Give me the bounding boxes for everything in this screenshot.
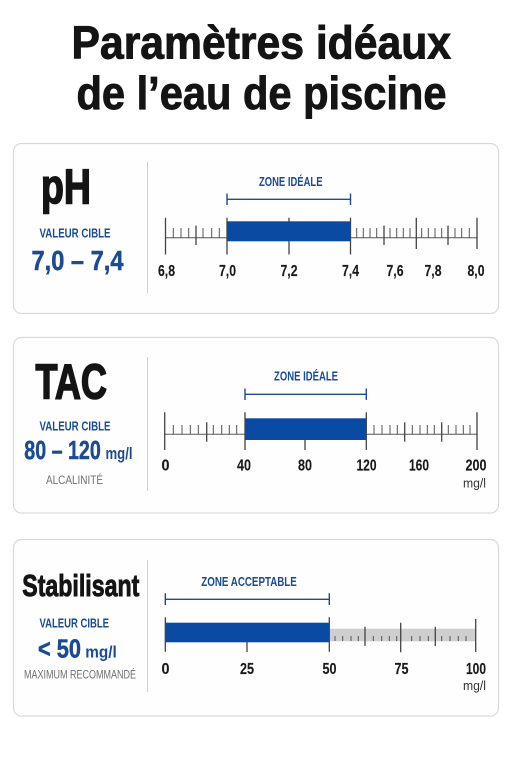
zone label: TAC: ZONE IDÉALE (274, 369, 338, 384)
heading: Stabilisant: Stabilisant (22, 568, 139, 603)
zone label: pH: ZONE IDÉALE (259, 174, 323, 189)
axis labels: pH: 7,2 (280, 263, 298, 280)
axis labels: TAC: 40 (237, 458, 251, 475)
note: alcalinité: ALCALINITÉ (46, 472, 103, 487)
value: TAC target: mg/l (106, 444, 132, 463)
bar: above limit range (329, 629, 476, 641)
bar: pH ideal range (227, 221, 350, 241)
title: de l’eau de piscine (76, 67, 446, 119)
axis labels: stabilisant: 75 (394, 661, 409, 678)
title (72, 16, 451, 119)
label: valeur cible pH: VALEUR CIBLE (40, 226, 111, 240)
axis labels: stabilisant: 0 (162, 661, 170, 678)
axis labels: stabilisant (162, 661, 486, 693)
unit: TAC: mg/l (463, 475, 486, 490)
bracket: acceptable zone (165, 593, 329, 605)
axis labels: stabilisant: 100 (466, 661, 486, 678)
note: maximum recommandé: MAXIMUM RECOMMANDÉ (24, 666, 136, 681)
panel: TAC (14, 338, 498, 513)
value: stabilisant target: mg/l (85, 642, 117, 661)
scale: stabilisant (165, 617, 476, 652)
axis labels: pH: 7,0 (219, 263, 236, 280)
heading: TAC: TAC (36, 356, 107, 410)
label: valeur cible stabilisant: VALEUR CIBLE (40, 615, 109, 630)
title: Paramètres idéaux (72, 16, 451, 68)
axis labels: TAC: 160 (409, 458, 429, 475)
value: stabilisant target: < 50 (38, 633, 81, 663)
axis labels: pH: 7,6 (386, 263, 404, 280)
scale: pH (166, 218, 477, 254)
value: stabilisant target (38, 633, 117, 663)
axis labels: pH: 6,8 (158, 263, 175, 280)
axis labels: pH: 7,8 (424, 263, 442, 280)
axis labels: stabilisant: 25 (240, 661, 254, 678)
axis labels: stabilisant: 50 (322, 661, 337, 678)
axis labels: pH (158, 263, 485, 280)
axis labels: pH: 7,4 (342, 263, 359, 280)
axis labels: pH: 8,0 (468, 263, 485, 280)
bracket: pH ideal zone (227, 194, 350, 205)
bar: acceptable range (165, 623, 329, 642)
value: pH target: 7,0 – 7,4 (32, 245, 124, 276)
axis labels: TAC (162, 458, 487, 490)
panel: Stabilisant (14, 540, 498, 716)
unit: stabilisant: mg/l (463, 678, 486, 693)
panel: pH (14, 144, 498, 314)
axis labels: TAC: 120 (356, 458, 377, 475)
axis labels: TAC: 0 (162, 458, 170, 475)
bar: TAC ideal range (245, 418, 366, 440)
axis labels: TAC: 200 (466, 458, 487, 475)
heading: pH: pH (41, 160, 91, 214)
bracket: TAC ideal zone (245, 388, 366, 400)
zone label: stabilisant: ZONE ACCEPTABLE (201, 574, 297, 589)
value: TAC target: 80 – 120 (24, 435, 101, 465)
scale: TAC (165, 412, 477, 450)
axis labels: TAC: 80 (298, 458, 312, 475)
label: valeur cible TAC: VALEUR CIBLE (40, 418, 111, 434)
